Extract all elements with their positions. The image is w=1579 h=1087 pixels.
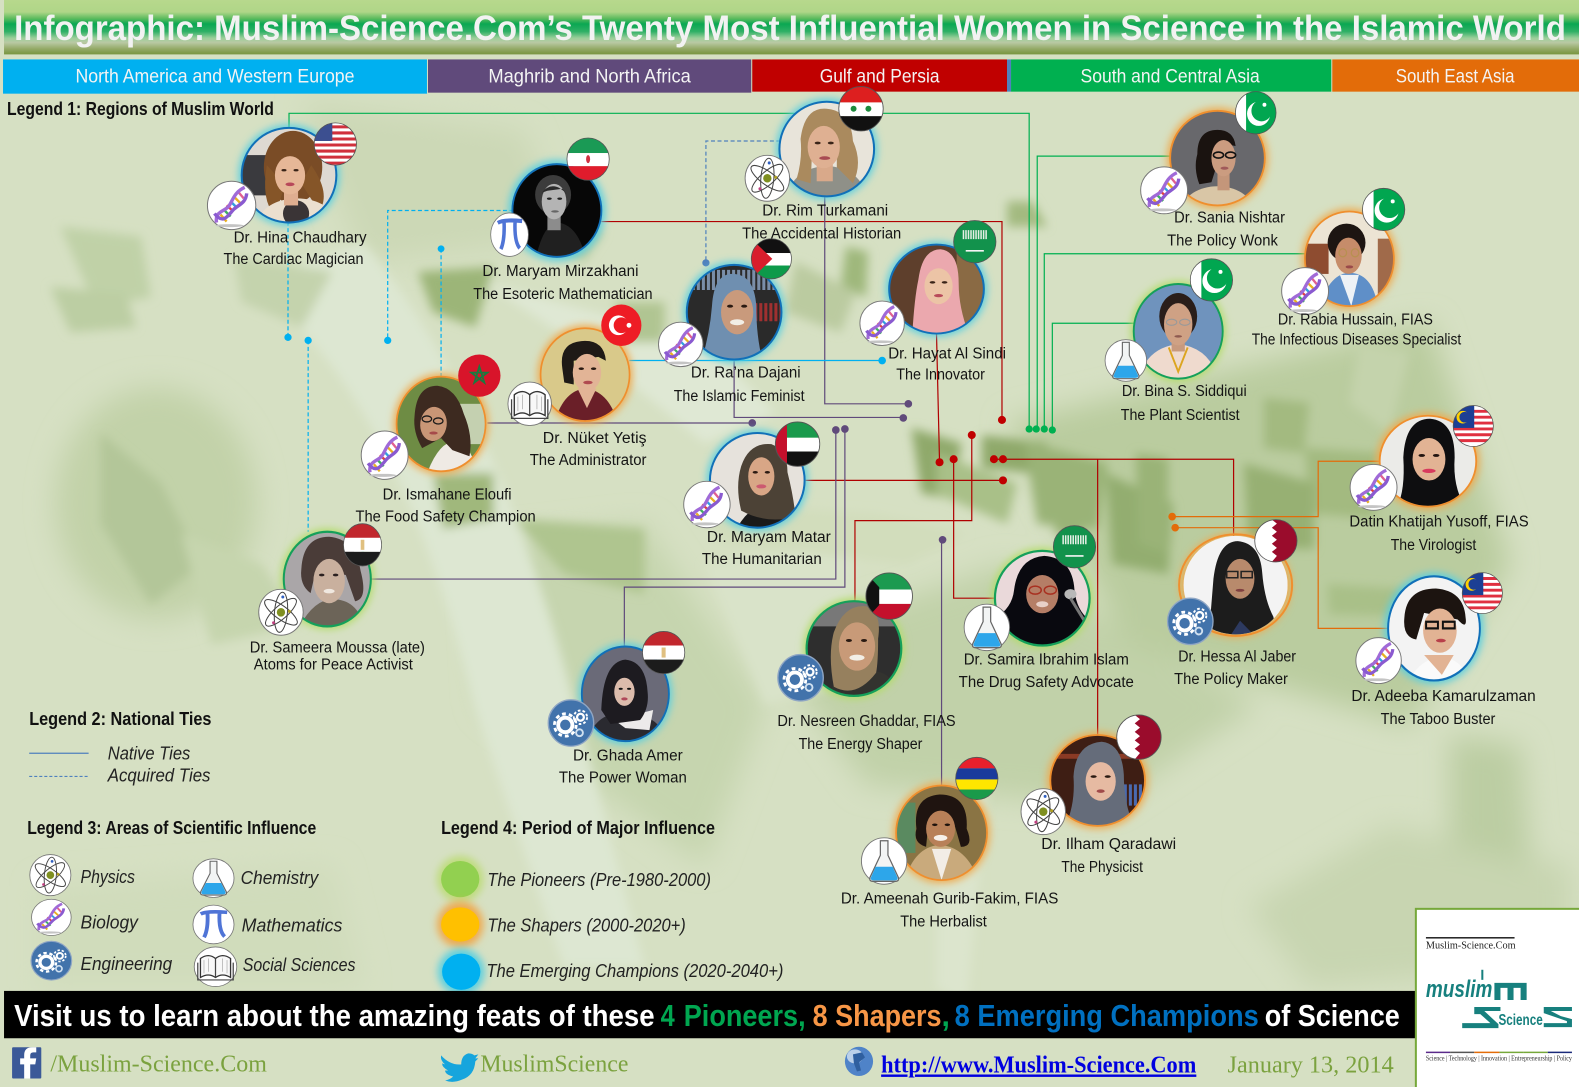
- icon: engineering: [1168, 598, 1213, 645]
- icon: biology: [1356, 638, 1401, 684]
- shapers key: The Shapers (2000-2020+): [487, 916, 686, 936]
- icon: biology: [361, 431, 408, 479]
- name label: Dr. Ilham Qaradawi: [1041, 835, 1176, 853]
- profile: Dr. Sania Nishtar: [1141, 92, 1286, 250]
- name label: The Physicist: [1061, 858, 1143, 876]
- flag: Pakistan: [1362, 188, 1405, 231]
- acquired ties key: Acquired Ties: [107, 765, 210, 785]
- name label: The Taboo Buster: [1381, 710, 1496, 728]
- call to action bar: 8 Emerging Champions: [955, 1000, 1259, 1033]
- chemistry key: Chemistry: [241, 868, 319, 888]
- icon: biology: [684, 481, 730, 528]
- portrait: [710, 433, 805, 528]
- icon: biology: [1141, 167, 1188, 214]
- name label: The Herbalist: [900, 912, 987, 930]
- name label: The Drug Safety Advocate: [959, 673, 1134, 691]
- profile: Dr. Ghada Amer: [548, 631, 687, 786]
- flag: Jordan: [751, 239, 791, 279]
- flag: Morocco: [458, 354, 500, 397]
- name label: The Administrator: [530, 451, 647, 469]
- flag: Saudi Arabia: [954, 221, 996, 263]
- name label: Dr. Ghada Amer: [573, 746, 683, 764]
- flag: Turkey: [601, 305, 641, 346]
- name label: [250, 639, 425, 674]
- shapers key: [437, 901, 686, 948]
- name label: [674, 364, 805, 405]
- profile: Dr. Nüket Yetiş: [508, 305, 647, 469]
- name label: Dr. Sameera Moussa (late): [250, 639, 425, 657]
- flag: Kuwait: [866, 573, 912, 619]
- name label: [1351, 687, 1536, 728]
- name label: [1174, 648, 1297, 688]
- flag: Qatar: [1255, 520, 1297, 562]
- physics key: [30, 855, 135, 896]
- legend 1: region bars: South and Central Asia: [1081, 67, 1260, 88]
- icon: social sciences: [508, 382, 551, 426]
- legend 3: areas of scientific influence: [27, 818, 355, 987]
- name label: Dr. Hina Chaudhary: [234, 229, 367, 247]
- date: January 13, 2014: [1228, 1051, 1394, 1078]
- name label: [355, 485, 536, 526]
- profile: Dr. Hessa Al Jaber: [1168, 520, 1297, 688]
- name label: [1167, 209, 1286, 250]
- name label: The Energy Shaper: [799, 735, 923, 753]
- flag: Pakistan: [1235, 92, 1276, 134]
- call to action bar: Visit us to learn about the amazing feats of these: [14, 1000, 655, 1033]
- icon: chemistry: [964, 604, 1010, 651]
- name label: The Accidental Historian: [742, 225, 901, 243]
- logo mark: Science: [1498, 1011, 1543, 1029]
- facebook handle: /Muslim-Science.Com: [50, 1050, 267, 1077]
- heading: Legend 2: National Ties: [29, 709, 211, 729]
- profile: Dr. Ismahane Elouafi: [355, 354, 536, 526]
- name label: Dr. Hessa Al Jaber: [1178, 648, 1297, 666]
- flag: Saudi Arabia: [1053, 526, 1096, 568]
- name label: Dr. Nüket Yetiş: [543, 429, 647, 447]
- icon: chemistry: [1105, 340, 1147, 381]
- profile: Dr. Adeeba Kamarulzaman: [1351, 573, 1536, 728]
- pioneers key: [437, 856, 711, 902]
- flag: USA: [314, 123, 356, 165]
- call to action bar: Pioneers,: [684, 1000, 806, 1033]
- social sciences key: Social Sciences: [243, 955, 355, 975]
- profile: Dr. Samira Ibrahim Islam: [959, 526, 1134, 691]
- call to action bar: 4: [661, 1000, 675, 1033]
- icon: twitter bird: [441, 1053, 478, 1082]
- physics key: Physics: [81, 867, 135, 887]
- flag: UAE: [775, 422, 820, 466]
- name label: The Humanitarian: [702, 550, 822, 568]
- flag: Malaysia: [1462, 573, 1502, 614]
- twitter handle: MuslimScience: [480, 1050, 628, 1077]
- portrait: [240, 126, 338, 224]
- flag: Malaysia: [1453, 405, 1493, 446]
- name label: The Cardiac Magician: [224, 250, 364, 268]
- portrait: [896, 785, 987, 880]
- portrait: [541, 328, 630, 421]
- name label: The Food Safety Champion: [355, 508, 536, 526]
- icon: biology: [1350, 464, 1397, 510]
- flag: Iran: [567, 138, 609, 180]
- icon: physics: [259, 589, 303, 635]
- legend 1: region bars: North America and Western Europe: [76, 67, 354, 88]
- profile: Dr. Rabia Hussain: [1252, 188, 1462, 348]
- call to action bar: [4, 991, 1416, 1038]
- portrait: [778, 100, 876, 198]
- profile: Dr. Maryam Mirzakhani: [473, 138, 653, 303]
- name label: [1121, 382, 1247, 424]
- icon: globe: [845, 1047, 873, 1076]
- flag: Pakistan: [1190, 259, 1233, 301]
- engineering key: Engineering: [81, 954, 172, 974]
- name label: Dr. Ameenah Gurib-Fakim, FIAS: [841, 889, 1058, 907]
- logo mark: [1426, 970, 1572, 1029]
- portrait: [889, 245, 984, 334]
- name label: [1349, 513, 1529, 554]
- name label: Dr. Samira Ibrahim Islam: [964, 651, 1129, 669]
- portrait: [397, 377, 486, 471]
- heading: Legend 3: Areas of Scientific Influence: [27, 818, 316, 838]
- icon: physics: [1021, 789, 1066, 835]
- name label: Dr. Sania Nishtar: [1174, 209, 1286, 227]
- logo mark: muslim: [1426, 976, 1492, 1003]
- profile: Datin Khatijah Yusoff: [1349, 405, 1529, 554]
- name label: The Plant Scientist: [1121, 406, 1240, 424]
- icon: biology: [1282, 268, 1329, 314]
- name label: The Innovator: [896, 366, 985, 384]
- name label: Atoms for Peace Activist: [254, 656, 413, 674]
- name label: Dr. Rabia Hussain, FIAS: [1278, 310, 1433, 328]
- engineering key: [31, 941, 172, 980]
- name label: [777, 712, 956, 753]
- profile: Dr. Hina Chaudhary: [207, 123, 367, 268]
- legend 1: region bars: Maghrib and North Africa: [488, 67, 691, 88]
- call to action bar: ,: [942, 1000, 950, 1033]
- native ties key: Native Ties: [108, 743, 190, 763]
- name label: Dr. Maryam Mirzakhani: [482, 262, 638, 280]
- profile: Dr. Maryam Matar: [684, 422, 831, 568]
- flag: Egypt: [343, 524, 382, 566]
- name label: Dr. Hayat Al Sindi: [888, 345, 1006, 363]
- flag: Egypt: [642, 631, 685, 674]
- profile: Dr. Ilham Qaradawi: [1021, 715, 1176, 876]
- name label: Dr. Maryam Matar: [707, 528, 831, 546]
- emerging champions key: The Emerging Champions (2020-2040+): [486, 961, 783, 981]
- profile: Dr. Sameera Moussa: [250, 524, 425, 674]
- name label: [559, 746, 687, 786]
- mathematics key: [193, 905, 342, 944]
- heading: Legend 4: Period of Major Influence: [441, 818, 715, 838]
- social sciences key: [194, 947, 355, 987]
- mathematics key: Mathematics: [242, 916, 342, 936]
- legend 4: period of major influence: [437, 818, 783, 995]
- name label: [1041, 835, 1176, 876]
- portrait: [582, 647, 669, 741]
- profile: Dr. Hayat Al Sindi: [860, 221, 1006, 384]
- name label: Datin Khatijah Yusoff, FIAS: [1349, 513, 1529, 531]
- name label: Dr. Bina S. Siddiqui: [1122, 382, 1247, 400]
- portrait: [284, 532, 371, 626]
- pioneers key: The Pioneers (Pre-1980-2000): [487, 870, 711, 890]
- national ties connector lines: [284, 113, 1388, 785]
- name label: [702, 528, 831, 568]
- flag: Syria: [839, 87, 883, 131]
- name label: The Power Woman: [559, 768, 687, 786]
- portrait: [512, 164, 601, 257]
- name label: Dr. Ismahane Eloufi: [383, 485, 512, 503]
- icon: mathematics: [491, 213, 528, 256]
- logo panel: [1416, 909, 1579, 1087]
- name label: [1252, 310, 1462, 348]
- portrait: [1179, 534, 1292, 636]
- name label: The Esoteric Mathematician: [473, 285, 653, 303]
- website link: http://www.Muslim-Science.Com: [881, 1051, 1196, 1078]
- profile: Dr. Ra'na Dajani: [659, 239, 805, 405]
- icon: biology: [659, 322, 703, 367]
- name label: [959, 651, 1134, 691]
- legend 1: region bars: South East Asia: [1396, 67, 1515, 88]
- portrait: [807, 601, 901, 696]
- portrait: [1305, 211, 1394, 306]
- icon: engineering: [548, 700, 594, 746]
- name label: Dr. Adeeba Kamarulzaman: [1351, 687, 1536, 705]
- call to action bar: of Science: [1265, 1000, 1400, 1033]
- name label: Dr. Nesreen Ghaddar, FIAS: [777, 712, 956, 730]
- legend 1: region bars: [3, 59, 1579, 94]
- name label: The Virologist: [1391, 536, 1477, 554]
- portrait: [1388, 576, 1480, 680]
- icon: biology: [207, 181, 256, 230]
- name label: Dr. Rim Turkamani: [762, 202, 888, 220]
- biology key: Biology: [81, 912, 139, 932]
- biology key: [32, 899, 139, 936]
- name label: [888, 345, 1006, 384]
- name label: The Policy Wonk: [1167, 232, 1279, 250]
- legend 1 heading: Legend 1: Regions of Muslim World: [7, 99, 274, 119]
- portrait: [995, 551, 1090, 646]
- emerging champions key: [438, 949, 783, 995]
- name label: [530, 429, 647, 469]
- legend 1: region bars: Gulf and Persia: [820, 67, 940, 88]
- legend 2: national ties: [29, 709, 211, 785]
- title banner: [4, 0, 1579, 54]
- icon: biology: [860, 301, 904, 346]
- name label: The Islamic Feminist: [674, 387, 805, 405]
- name label: [473, 262, 653, 303]
- portrait: [1380, 416, 1476, 507]
- portrait: [1169, 110, 1266, 206]
- name label: [742, 202, 901, 243]
- chemistry key: [193, 859, 319, 897]
- site name: Muslim-Science.Com: [1426, 941, 1516, 952]
- name label: Dr. Ra’na Dajani: [691, 364, 801, 382]
- icon: chemistry: [861, 838, 907, 884]
- name label: The Infectious Diseases Specialist: [1252, 330, 1462, 348]
- portrait: [1134, 284, 1223, 379]
- profile: Dr. Bina S. Siddiqui: [1105, 259, 1247, 424]
- portrait: [1050, 735, 1145, 826]
- profile: Dr. Ameenah Gurib-Fakim: [841, 757, 1058, 930]
- portrait: [687, 265, 781, 360]
- call to action bar: 8 Shapers: [813, 1000, 942, 1033]
- name label: The Policy Maker: [1174, 670, 1289, 688]
- profile: Dr. Rim Turkamani: [742, 87, 901, 243]
- icon: physics: [745, 155, 790, 201]
- name label: [841, 889, 1058, 930]
- name label: [224, 229, 367, 268]
- flag: Mauritius: [956, 757, 998, 800]
- icon: facebook: [12, 1047, 41, 1079]
- flag: Qatar: [1117, 715, 1161, 759]
- profile: Dr. Nesreen Ghaddar: [777, 573, 956, 753]
- icon: engineering: [778, 655, 823, 701]
